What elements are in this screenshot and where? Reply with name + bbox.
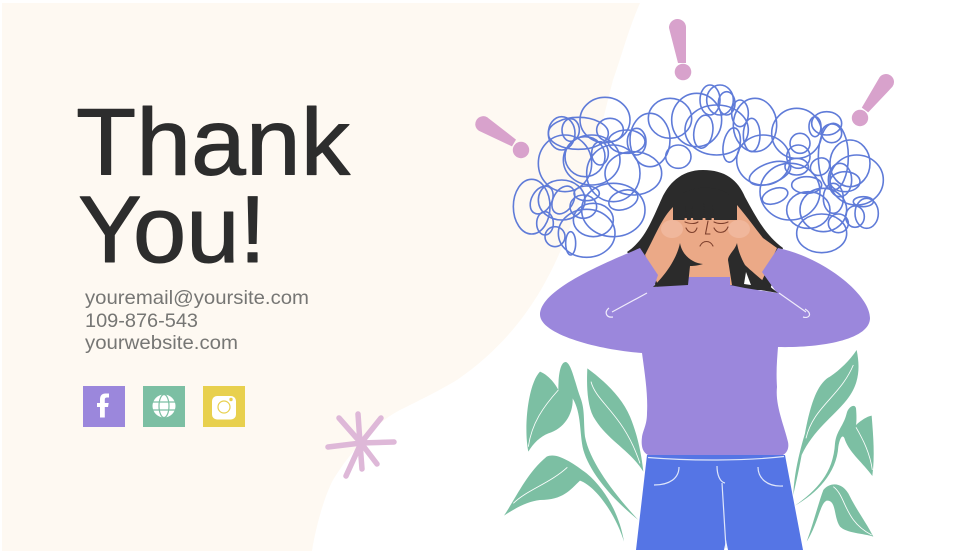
title: You!	[78, 177, 266, 283]
exclamation left	[475, 116, 529, 158]
exclamation top	[669, 19, 691, 80]
leaf veins	[513, 365, 872, 535]
title: Thank	[76, 90, 351, 196]
icon: instagram	[203, 386, 245, 427]
contact details	[85, 287, 309, 354]
social icons	[83, 386, 245, 427]
cheeks	[661, 220, 750, 238]
hair gap	[744, 272, 751, 285]
sweater	[540, 248, 870, 455]
face	[672, 218, 738, 280]
skin: neck and forearms	[645, 205, 777, 285]
panel: cream background shape	[2, 3, 640, 551]
hair fringe	[673, 188, 737, 220]
shorts	[636, 455, 803, 550]
title	[76, 90, 351, 283]
plants	[504, 350, 874, 542]
contact details: youremail@yoursite.com	[85, 287, 309, 309]
contact details: 109-876-543	[85, 310, 198, 332]
icon: pink asterisk star	[328, 414, 394, 476]
facial features	[685, 221, 728, 246]
contact details: yourwebsite.com	[85, 332, 238, 354]
icon: facebook	[83, 386, 125, 427]
front hair strands	[653, 243, 778, 293]
exclamation right	[852, 74, 894, 126]
scribble cloud above head	[513, 85, 883, 257]
person	[540, 170, 870, 550]
icon: globe	[143, 386, 185, 427]
back hair	[627, 170, 783, 290]
left plant leaves	[504, 362, 643, 542]
right plant leaves	[793, 350, 874, 542]
icon: exclamation marks	[475, 19, 894, 158]
